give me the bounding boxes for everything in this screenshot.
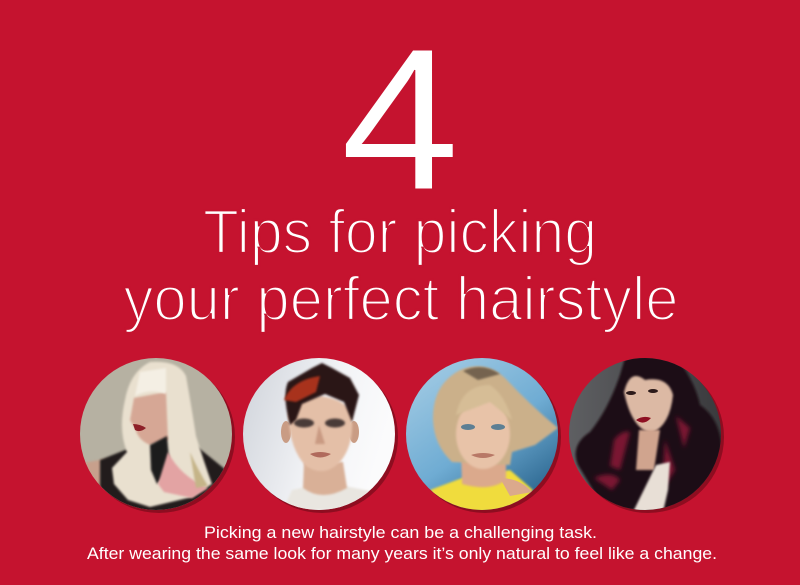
infographic canvas — [80, 50, 724, 562]
portrait: short dark red pixie cut — [243, 358, 398, 513]
portrait: long platinum hair — [78, 358, 235, 513]
caption: After wearing the same look for many years it’s only natural to feel like a change. — [87, 545, 717, 563]
title: your perfect hairstyle — [124, 265, 678, 334]
title — [124, 198, 678, 334]
caption: Picking a new hairstyle can be a challenging task. — [204, 524, 597, 542]
big number 4: 4 — [340, 6, 460, 232]
title: Tips for picking — [203, 198, 597, 267]
caption — [87, 524, 717, 563]
portrait: long dark burgundy waves — [569, 356, 724, 513]
portrait: blonde bob on blue background — [406, 358, 561, 513]
